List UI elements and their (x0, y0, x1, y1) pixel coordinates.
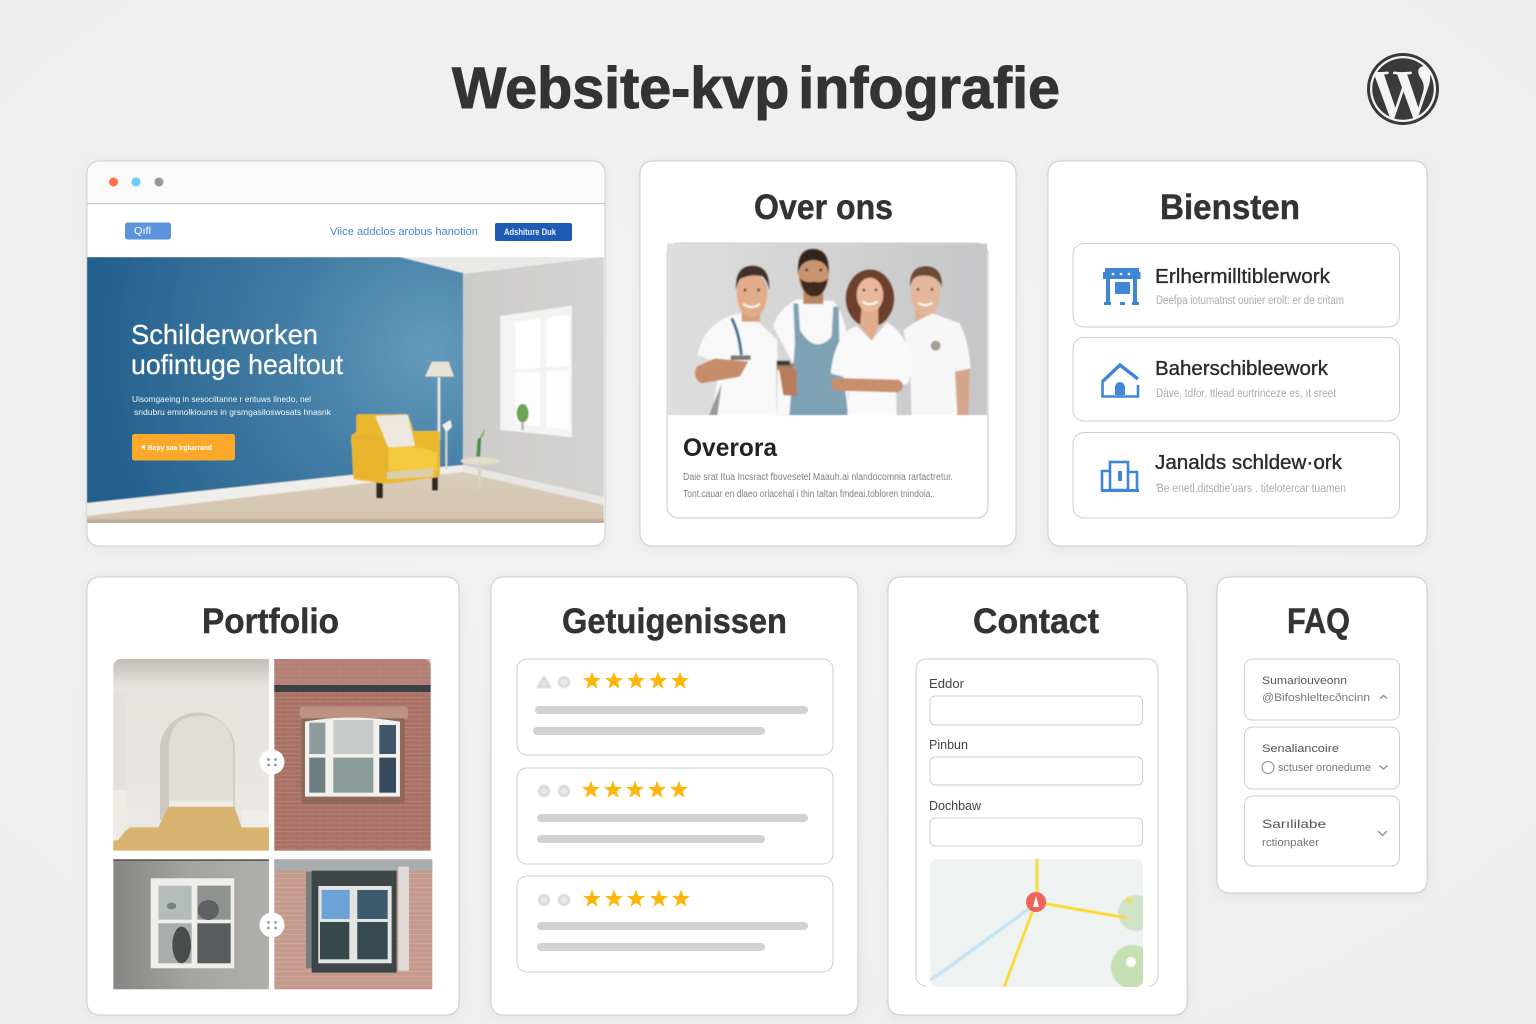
map pin (1026, 892, 1046, 912)
service card 3 (1073, 432, 1400, 518)
about paragraph: Tont.cauar en dlaeo orlacehal i thin taltan fmdeai.tobloren tnindoia.. (683, 489, 935, 500)
side table with plant (460, 428, 500, 476)
site logo button (125, 222, 171, 240)
faq item 2 (1244, 727, 1400, 789)
before-after handle bottom (260, 912, 284, 938)
about paragraph: Daie srat Itua Incsract fbovesetel Maauh.ai nlandocomnia rartactretur. (683, 472, 953, 483)
white caption background (668, 416, 987, 419)
testimonial card 1 (517, 659, 833, 755)
panel: portfolio (87, 577, 459, 1015)
person 4 (903, 266, 971, 415)
floor lamp (425, 362, 454, 470)
navigation button (495, 223, 572, 241)
star rating (582, 780, 688, 798)
map (930, 858, 1155, 990)
service card 1 (1073, 244, 1400, 327)
faq item 3: Sarılilabe (1262, 817, 1326, 831)
hero heading (131, 319, 343, 380)
hero heading: Schilderworken (131, 319, 318, 350)
hero call to action button (132, 434, 235, 460)
heading: portfolio: Portfolio (202, 602, 339, 641)
panel: getuigenissen (491, 577, 858, 1015)
faq item 3 (1244, 796, 1400, 866)
team photo (667, 243, 987, 415)
form field: Eddor (929, 677, 1142, 725)
icon: WordPress logo (1367, 53, 1439, 125)
photo: grey wall window (113, 859, 269, 989)
hero photo: painted room (87, 257, 604, 523)
photo: brick facade dark frame window (274, 859, 432, 989)
faq item 2: sctuser oronedume (1278, 762, 1371, 774)
faq item 1: Sumariouveonn (1262, 675, 1347, 687)
heading: faq: FAQ (1287, 602, 1350, 641)
heading: diensten: Biensten (1160, 188, 1300, 227)
testimonial card 3 (517, 876, 833, 972)
icon: house (1102, 365, 1138, 396)
panel: over ons (640, 161, 1016, 546)
heading: over ons: Over ons (754, 188, 893, 227)
quote marks (539, 895, 569, 905)
hero paragraph: sndubru emnolkiounrs in grsmgasiloswosats hnasnk (134, 407, 332, 417)
faq item 3: rctionpaker (1262, 837, 1319, 849)
form field: Eddor: Eddor (929, 677, 964, 691)
star rating (583, 890, 690, 907)
heading: getuigenissen: Getuigenissen (562, 602, 787, 641)
service card 3: Ɓe enetl.ditsdtie'uars . titelotercar tuamen (1156, 483, 1346, 495)
hero paragraph (132, 394, 332, 417)
photo: brick facade with bay window (274, 659, 431, 851)
window (500, 306, 572, 437)
navigation links: Viice addclos arobus hanotion (330, 226, 478, 238)
person 1 (695, 265, 778, 415)
heading: contact: Contact (973, 602, 1099, 641)
navigation button: Adshiture Duk (504, 227, 557, 237)
panel: diensten (1048, 161, 1427, 546)
faq item 1: @Bifoshleltecðncinn (1262, 692, 1370, 704)
icon: storefront (1103, 268, 1140, 305)
quote marks (539, 786, 569, 796)
service card 2: Baherschibleework (1155, 358, 1329, 380)
inner card (667, 243, 988, 518)
hero heading: uofintuge healtout (131, 349, 343, 380)
form field: Dochbaw: Dochbaw (929, 799, 982, 813)
contact form card (916, 659, 1158, 986)
person 2 (773, 249, 848, 415)
browser bar (87, 162, 605, 204)
before-after handle top (260, 750, 284, 774)
faq item 2: Senaliancoire (1262, 743, 1339, 755)
service card 2 (1073, 338, 1400, 421)
form field: Pinbun (929, 738, 1142, 785)
title: Website-kvp infografie (452, 56, 1060, 121)
about paragraph (683, 472, 953, 500)
panel: contact (888, 577, 1187, 1015)
star rating (583, 672, 689, 689)
service card 3: Janalds schldew·ork (1155, 452, 1343, 474)
yellow armchair (352, 415, 438, 498)
form field: Dochbaw (929, 799, 1142, 846)
service card 1: Deefpa iotumatnst ounier erolt: er de critam (1156, 295, 1344, 307)
form field: Pinbun: Pinbun (929, 738, 968, 752)
hero paragraph: Uisomgaeing in sesociitanne r entuws linedo, nel (132, 394, 311, 404)
service card 2: Dàve, tdfor, ttlead eurtrinceze es, ıt sreet (1156, 388, 1337, 400)
panel: website hero mockup (87, 161, 605, 546)
icon: buildings (1101, 462, 1139, 490)
service card 1: Erlhermilltiblerwork (1155, 266, 1331, 288)
about subheading: Overora (683, 434, 778, 462)
quote marks (538, 677, 569, 687)
photo: arched interior (113, 659, 269, 851)
panel: faq (1217, 577, 1427, 893)
testimonial card 2 (517, 768, 833, 864)
hero call to action button: Bepy saa lrgkarrand (148, 443, 212, 452)
person 3 (831, 269, 913, 415)
faq item 1 (1244, 659, 1400, 720)
site logo button: Qıfl (134, 226, 151, 237)
